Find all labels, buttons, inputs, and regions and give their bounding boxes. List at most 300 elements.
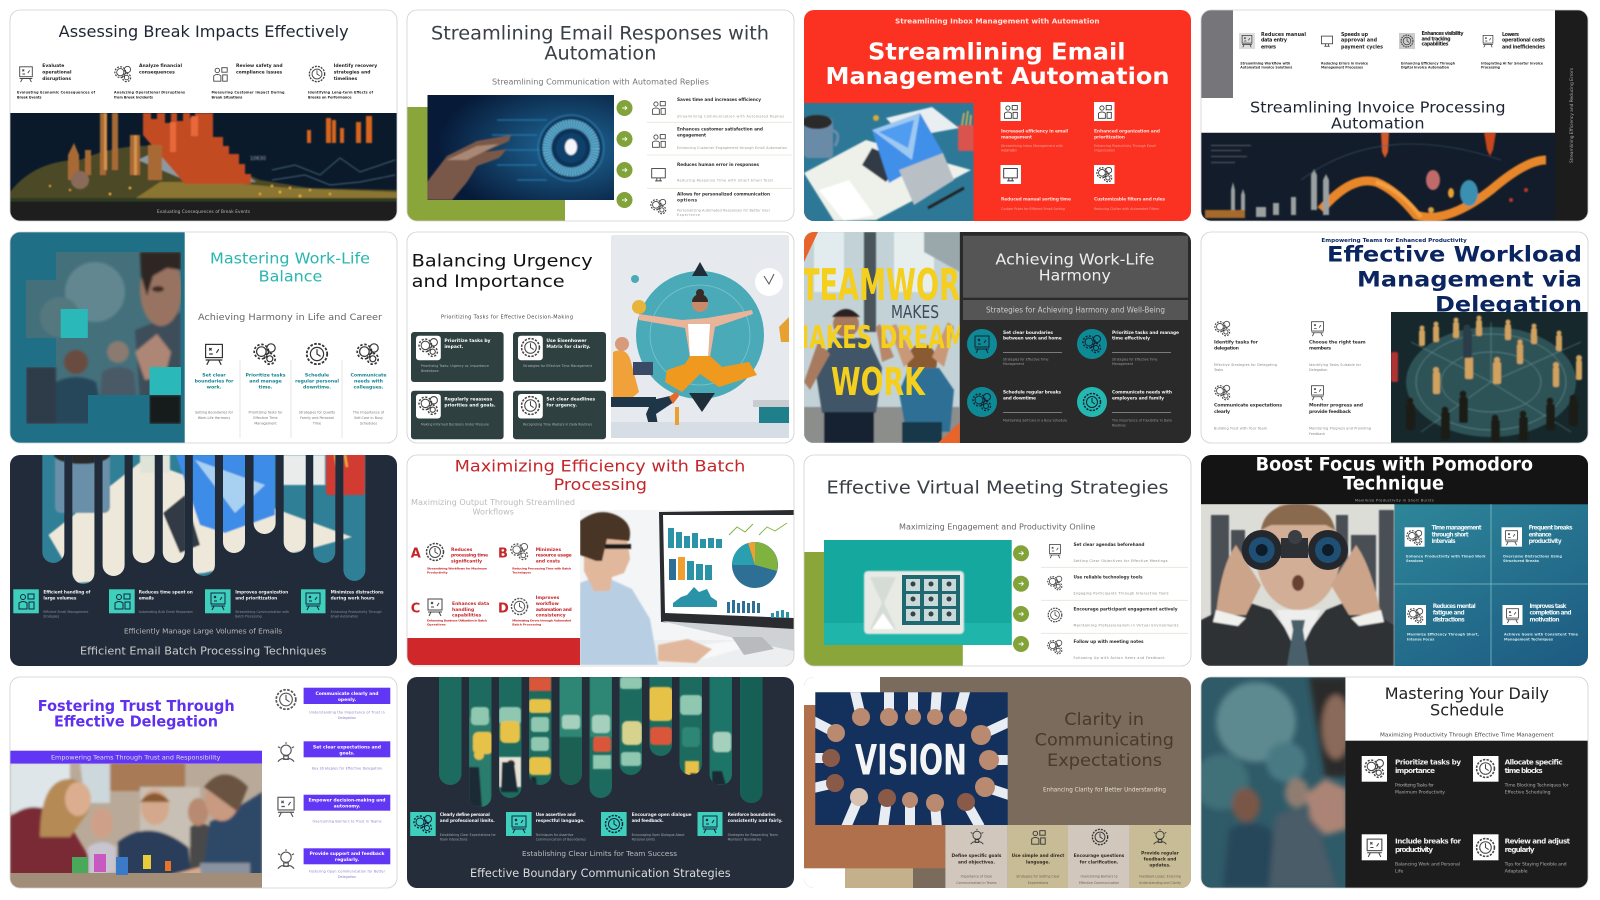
title: Streamlining Email Responses with — [431, 23, 769, 44]
title: Automation — [1331, 114, 1424, 132]
title — [1251, 101, 1504, 128]
title — [826, 39, 1170, 90]
four item row: Enhancing Productivity Through — [331, 610, 382, 614]
four strategies: Strategies for Effective Time — [1112, 357, 1157, 361]
title: and Importance — [412, 272, 565, 292]
four strategies: Communicate needs with — [1112, 389, 1172, 395]
image: team around table — [10, 764, 262, 888]
four assessment items: Break Situations — [212, 96, 242, 100]
four lettered items: workflow — [536, 601, 559, 607]
four assessment items: Identifying Long-term Effects of — [308, 90, 374, 94]
four delegation actions: Understanding the Importance of Trust in — [309, 710, 385, 714]
four item row: Reduces time spent on — [139, 589, 193, 595]
four strategies: time effectively — [1112, 336, 1150, 342]
four item row: Efficient Email Management — [43, 610, 89, 614]
benefit list: Enhancing Customer Engagement through Email Automation — [677, 146, 787, 150]
four item row: Strategies for Respecting Team — [728, 833, 778, 837]
four scheduling tips: Prioritize tasks by — [1395, 757, 1461, 766]
four scheduling tips: Allocate specific — [1505, 757, 1563, 766]
four item row: Batch Processing — [235, 615, 262, 619]
four columns: Importance of Clear — [961, 875, 993, 879]
four benefits: Achieve Goals with Consistent Time — [1504, 633, 1579, 637]
four delegation steps: Monitoring Progress and Providing — [1309, 427, 1371, 431]
four delegation steps: Effective Strategies for Delegating — [1214, 363, 1277, 367]
teal side block — [10, 232, 185, 443]
four task cards: Prioritizing Tasks: Urgency vs. Importance — [421, 364, 489, 368]
four strategies: Prioritize tasks and manage — [1112, 330, 1179, 336]
strategy list: Maintaining Professionalism in Virtual Environments — [1074, 624, 1179, 628]
title — [432, 25, 768, 60]
icon grid with four features: Organization — [1094, 149, 1115, 153]
four benefits: fatigue and — [1433, 611, 1465, 617]
four lettered items: Reducing Processing Time with Batch — [512, 566, 571, 570]
image: data city with orange ribbon — [1201, 132, 1555, 221]
strategy list: Set clear agendas beforehand — [1074, 542, 1144, 548]
image: analyst at desktop dashboard — [580, 510, 794, 665]
four benefits: Intense Focus — [1407, 637, 1434, 641]
subtitle: Streamlining Communication with Automated Replies — [492, 77, 709, 86]
four assessment items: Evaluate — [42, 63, 64, 69]
four lettered items: processing time — [451, 553, 488, 559]
four lettered items: Techniques — [512, 570, 531, 574]
four strategy columns: Prioritize tasks — [246, 372, 286, 378]
subtitle: Enhancing Clarity for Better Understanding — [1043, 787, 1166, 793]
purple subtitle band: Empowering Teams Through Trust and Responsibility — [51, 754, 221, 762]
four benefits: Structured Breaks — [1503, 559, 1539, 563]
four item row: Techniques for Assertive — [535, 833, 574, 837]
four columns: Feedback Loops: Ensuring — [1139, 875, 1181, 879]
four task cards: Making Informed Decisions Under Pressure — [421, 422, 489, 426]
benefit list: Allows for personalized communication — [677, 191, 770, 197]
four assessment items: Identify recovery — [334, 63, 377, 69]
title box: Achieving Work-Life — [995, 250, 1154, 268]
four benefits: Frequent breaks — [1529, 525, 1573, 531]
illustration: balanced person in teal circle — [611, 235, 789, 438]
footer caption bar — [10, 202, 397, 221]
benefit list: Personalizing Automated Responses for Better User — [677, 208, 771, 212]
four delegation steps: Identifying Tasks Suitable for — [1309, 363, 1362, 367]
four delegation steps: clearly — [1214, 409, 1230, 415]
four delegation steps: Identify tasks for — [1214, 339, 1259, 345]
title: Effective Workload — [1327, 243, 1582, 268]
four delegation steps: Monitor progress and — [1309, 403, 1363, 409]
title — [455, 457, 745, 494]
four task cards: Prioritize tasks by — [444, 338, 491, 344]
panel: boost focus with pomodoro — [1201, 454, 1588, 666]
green accent block — [804, 552, 963, 666]
title: Efficient Email Batch Processing Techniques — [80, 644, 327, 657]
four lettered items: Productivity — [427, 570, 448, 574]
four item row: Automating Bulk Email Responses — [139, 610, 193, 614]
four benefits: enhance — [1529, 532, 1552, 538]
subtitle: Maximizing Output Through Streamlined — [411, 498, 575, 507]
four strategy columns: colleagues. — [354, 384, 384, 390]
image: economic landscape chart — [10, 113, 397, 202]
four item row: and professional limits. — [440, 818, 495, 824]
subtitle: Prioritizing Tasks for Effective Decision-Making — [441, 315, 573, 321]
four invoice benefits: capabilities — [1422, 41, 1449, 47]
four lettered items: Reduces — [451, 547, 473, 553]
four assessment items: from Break Incidents — [114, 96, 153, 100]
four columns: Use simple and direct — [1012, 853, 1064, 859]
four item row: emails — [139, 595, 154, 601]
four benefits: Improves task — [1530, 604, 1567, 610]
four invoice benefits: Processing — [1481, 65, 1501, 69]
four item row — [410, 812, 783, 842]
four task cards: impact. — [444, 344, 464, 350]
four strategy columns: Setting Boundaries for — [195, 410, 234, 414]
image strips: speech bubbles — [407, 677, 794, 817]
four delegation actions: Empower decision-making and — [308, 798, 386, 804]
icon grid with four features: Reducing Clutter with Automated Filters — [1094, 207, 1159, 211]
four item row: during work hours — [331, 595, 375, 601]
four item row: Encourage open dialogue — [632, 812, 692, 818]
four columns: language. — [1026, 859, 1050, 865]
panel: invoice processing automation — [1201, 10, 1588, 222]
image: blurred executive pointing — [1201, 677, 1346, 888]
subtitle — [411, 498, 575, 516]
title: Mastering Work-Life — [210, 249, 370, 267]
purple subtitle band — [10, 751, 262, 764]
four invoice benefits: Reduces manual — [1261, 32, 1306, 38]
four assessment items: Review safety and — [236, 63, 283, 69]
four item row: Minimizes distractions — [331, 589, 384, 595]
panel: mastering your daily schedule — [1193, 677, 1588, 888]
title: Balance — [259, 268, 322, 286]
title box: Harmony — [1039, 267, 1111, 285]
four delegation actions: Fostering Open Communication for Better — [309, 870, 386, 874]
four columns: Communication in Teams — [956, 881, 997, 885]
strategy list: Engaging Participants Through Interactive Tools — [1074, 591, 1169, 595]
four scheduling tips — [1362, 756, 1571, 874]
four task cards: for urgency. — [546, 402, 577, 408]
four columns: Expectations — [1028, 881, 1049, 885]
eyebrow subtitle: Empowering Teams for Enhanced Productivity — [1321, 238, 1467, 244]
icon grid with four features: Custom Rules for Efficient Email Sorting — [1001, 207, 1065, 211]
four lettered items: Improves — [536, 595, 560, 601]
panel: fostering trust through delegation — [10, 677, 397, 889]
panel: mastering work-life balance — [10, 232, 397, 443]
four item row: Communication of Boundaries — [536, 838, 586, 842]
panel: streamlining email management — [802, 10, 1191, 221]
four lettered items: Batch Processing — [512, 622, 541, 626]
four item row: large volumes — [43, 595, 77, 601]
title box — [963, 236, 1188, 298]
four strategies: Management — [1003, 362, 1025, 366]
four benefits: through short — [1432, 532, 1469, 538]
four scheduling tips: Maximum Productivity — [1395, 789, 1445, 795]
four benefits: distractions — [1433, 617, 1465, 623]
four delegation steps: provide feedback — [1309, 409, 1352, 415]
four item row: Email Automation — [331, 615, 358, 619]
image: economic landscape chart: 10630 — [250, 156, 266, 162]
four scheduling tips: Adaptable — [1505, 868, 1528, 874]
title: Streamlining Invoice Processing — [1250, 98, 1506, 116]
four item row: Use assertive and — [536, 812, 576, 818]
four lettered items: capabilities — [452, 613, 482, 619]
four invoice benefits: approval and — [1341, 38, 1378, 44]
title: Balancing Urgency — [412, 252, 593, 272]
four item row: Improves organization — [235, 589, 288, 595]
four columns: feedback and — [1144, 856, 1176, 862]
four invoice benefits: and inefficiencies — [1502, 44, 1545, 50]
four delegation actions: autonomy. — [334, 804, 361, 810]
four strategy columns: Schedule — [305, 372, 329, 378]
four assessment items: timelines — [334, 76, 357, 82]
four lettered items: resource usage — [536, 553, 572, 559]
icon grid with four features: Enhanced organization and — [1094, 128, 1160, 134]
green accent block — [407, 107, 565, 221]
four benefits: productivity — [1529, 539, 1562, 545]
icon grid with four features: Streamlining Inbox Management with — [1001, 144, 1063, 148]
subtitle: Efficiently Manage Large Volumes of Emails — [124, 626, 282, 635]
four lettered items: B — [498, 546, 508, 561]
panel: assessing break impacts — [10, 10, 397, 221]
benefit list: engagement — [677, 133, 706, 139]
title: Fostering Trust Through — [38, 697, 235, 715]
icon grid with four features: Enhancing Productivity Through Email — [1094, 144, 1156, 148]
title: Management Automation — [826, 64, 1170, 90]
four scheduling tips: Balancing Work and Personal — [1395, 861, 1460, 867]
four scheduling tips: Review and adjust — [1505, 836, 1571, 845]
four item row: Reinforce boundaries — [728, 812, 776, 818]
four delegation actions: Delegation — [338, 716, 356, 720]
four assessment items: strategies and — [334, 70, 371, 76]
four item row: Streamlining Communication with — [235, 610, 289, 614]
four benefits: Enhance Productivity with Timed Work — [1406, 554, 1486, 558]
benefit list — [647, 97, 792, 217]
four columns — [945, 825, 1191, 888]
four lettered items: C — [411, 601, 420, 616]
four item row: Establishing Clear Expectations for — [440, 833, 497, 837]
red accent bar — [407, 638, 580, 665]
four columns: Understanding and Clarity — [1139, 881, 1181, 885]
four lettered items: and costs — [536, 559, 560, 565]
four invoice benefits: Automated Invoice Solutions — [1240, 65, 1292, 69]
four benefits: Time management — [1432, 525, 1482, 531]
four strategy columns: time. — [259, 384, 273, 390]
four lettered items: Enhances data — [452, 601, 489, 607]
four delegation steps: Choose the right team — [1309, 339, 1366, 345]
four task cards: Use Eisenhower — [546, 338, 587, 344]
four strategies: Set clear boundaries — [1003, 330, 1053, 336]
four scheduling tips: Tips for Staying Flexible and — [1504, 861, 1567, 867]
four assessment items: Measuring Customer Impact During — [212, 90, 285, 94]
four invoice benefits: payment cycles — [1341, 44, 1383, 50]
four assessment items: compliance issues — [236, 70, 282, 76]
four task cards: Regularly reassess — [444, 396, 493, 402]
title: Effective Delegation — [54, 712, 218, 730]
four columns: for clarification. — [1080, 859, 1119, 865]
title: Management via — [1357, 268, 1582, 293]
four assessment items: Evaluating Economic Consequences of — [17, 90, 96, 94]
panel: balancing urgency and importance — [407, 232, 794, 443]
four strategies: Strategies for Effective Time — [1003, 357, 1048, 361]
grey accent block — [1201, 10, 1233, 98]
panel: maximizing efficiency with batch processing — [407, 455, 794, 666]
four columns: updates. — [1149, 862, 1171, 868]
white title panel: Mastering Your Daily — [1385, 684, 1549, 703]
benefit list: Enhances customer satisfaction and — [677, 126, 763, 132]
four delegation actions — [276, 688, 390, 879]
four task cards: Matrix for clarity. — [546, 344, 591, 350]
four lettered items: automation and — [536, 607, 572, 613]
four strategies: Schedule regular breaks — [1003, 389, 1061, 395]
four strategies: Routines — [1112, 424, 1126, 428]
image: man with binoculars — [1201, 504, 1394, 666]
title: Automation — [544, 43, 656, 64]
four item row: and feedback. — [632, 818, 664, 824]
four delegation steps: delegation — [1214, 345, 1239, 351]
four assessment items: Analyze financial — [139, 63, 182, 69]
four delegation actions: Communicate clearly and — [316, 691, 378, 697]
four strategy columns — [195, 344, 387, 438]
title — [412, 252, 593, 292]
strategy list — [1041, 542, 1188, 660]
four delegation actions: Delegation — [338, 875, 356, 879]
image: network of standing figures — [1391, 312, 1588, 443]
four item row: Personal Limits — [632, 838, 655, 842]
header band with title: Technique — [1343, 472, 1444, 494]
image: robotic hand and circular interface — [428, 95, 614, 200]
icon grid with four features — [1000, 102, 1165, 211]
image: email on desk — [804, 103, 974, 221]
four benefits: intervals — [1432, 539, 1456, 545]
panel: clarity in communicating expectations — [804, 677, 1191, 888]
strategy list: Setting Clear Objectives for Effective Meetings — [1074, 559, 1168, 563]
four item row: Team Interactions — [439, 838, 468, 842]
four task cards: Strategies for Effective Time Management — [523, 364, 593, 368]
subtitle: Maximizing Engagement and Productivity Online — [899, 522, 1096, 531]
four invoice benefits: Lowers — [1502, 32, 1519, 38]
footer caption bar: Evaluating Consequences of Break Events — [157, 209, 250, 214]
strategy list: Following Up with Action Items and Feedback — [1074, 656, 1165, 660]
strategy list: Use reliable technology tools — [1074, 574, 1143, 580]
four columns: Strategies for Setting Clear — [1016, 875, 1060, 879]
four strategy columns: Schedules — [360, 422, 377, 426]
four lettered items: Streamlining Workflows for Maximum — [427, 566, 487, 570]
four strategy columns: regular personal — [295, 378, 339, 384]
header band with title: Boost Focus with Pomodoro — [1256, 454, 1533, 476]
four strategy columns: Self-Care in Busy — [354, 416, 383, 420]
four invoice benefits: Enhances visibility — [1422, 31, 1464, 37]
dark side strip with vertical caption — [1555, 10, 1588, 221]
four delegation actions: goals. — [339, 750, 355, 756]
subtitle: Achieving Harmony in Life and Career — [198, 312, 382, 323]
four strategy columns: The Importance of — [352, 410, 385, 414]
panel: effective workload management — [1201, 232, 1588, 443]
four item row: Members' Boundaries — [728, 838, 762, 842]
image: blurred executive pointing — [26, 252, 182, 424]
title: Maximizing Efficiency with Batch — [455, 457, 745, 476]
four benefits: Management Techniques — [1504, 637, 1553, 641]
four item row: and prioritization — [235, 595, 277, 601]
subtitle: Workflows — [472, 507, 514, 516]
benefit list: Reduces human error in responses — [677, 162, 759, 168]
four lettered items: significantly — [451, 559, 482, 565]
panel: effective virtual meeting strategies — [804, 455, 1191, 666]
benefit list: Streamlining Communication with Automated Replies — [677, 114, 784, 118]
title — [1035, 710, 1174, 770]
benefit list: Reducing Response Time with Smart Email Tools — [677, 179, 773, 183]
four delegation steps: Feedback — [1309, 432, 1325, 436]
dark side strip with vertical caption: Streamlining Efficiency and Reducing Errors — [1569, 67, 1575, 163]
four strategy columns: Communicate — [350, 372, 387, 378]
four benefits: Reduces mental — [1433, 604, 1476, 610]
colour blocks — [804, 677, 945, 888]
icon grid with four features: management — [1001, 134, 1033, 140]
four strategy columns: Strategies for Quality — [299, 410, 335, 414]
white title panel: Maximizing Productivity Through Effective Time Management — [1380, 732, 1554, 738]
title: Assessing Break Impacts Effectively — [59, 22, 349, 41]
image: fists around VISION: VISION — [855, 735, 967, 784]
four scheduling tips: productivity — [1395, 845, 1433, 854]
title — [38, 697, 235, 730]
four delegation actions: Provide support and feedback — [310, 851, 386, 857]
four strategy columns: downtime. — [303, 384, 331, 390]
title: Expectations — [1047, 751, 1162, 770]
title: Processing — [554, 475, 647, 494]
four strategies: employers and family — [1112, 395, 1164, 401]
icon grid with four features: Customizable filters and rules — [1094, 197, 1165, 203]
four invoice benefits: Enhancing Efficiency Through — [1401, 61, 1456, 65]
four invoice benefits: Management Processes — [1321, 65, 1363, 69]
title: Communicating — [1035, 731, 1174, 750]
four strategy columns: Effective Time — [253, 416, 278, 420]
image: teamwork celebration with wall lettering: MAKES — [891, 302, 939, 323]
four columns: Overcoming Barriers to — [1080, 875, 1118, 879]
four item row — [13, 589, 384, 619]
four assessment items: consequences — [139, 70, 175, 76]
four scheduling tips: Prioritizing Tasks for — [1395, 782, 1434, 788]
four strategies: Maintaining Self-Care in a Busy Schedule — [1003, 419, 1067, 423]
four scheduling tips: time blocks — [1505, 766, 1543, 775]
four scheduling tips: Life — [1395, 868, 1403, 874]
icon grid with four features: Reduced manual sorting time — [1001, 197, 1071, 203]
four item row: Strategies — [43, 615, 60, 619]
four invoice benefits: Speeds up — [1341, 32, 1369, 38]
four scheduling tips: Time Blocking Techniques for — [1504, 782, 1569, 788]
subtitle band — [963, 300, 1188, 320]
four lettered items — [411, 543, 572, 626]
four strategy columns: Set clear — [202, 372, 226, 378]
image: teamwork celebration with wall lettering: WORK — [831, 360, 926, 404]
subtitle band: Strategies for Achieving Harmony and Well-Being — [986, 305, 1165, 314]
four assessment items: Break Events — [17, 96, 42, 100]
four assessment items: disruptions — [42, 76, 71, 82]
four delegation steps: members — [1309, 345, 1331, 351]
four invoice benefits: errors — [1261, 44, 1276, 50]
four delegation actions: Set clear expectations and — [313, 744, 381, 750]
title — [212, 252, 370, 282]
four strategy columns: Family and Personal — [300, 416, 334, 420]
four delegation steps: Communicate expectations — [1214, 403, 1282, 409]
eyebrow subtitle: Streamlining Inbox Management with Automation — [895, 17, 1100, 25]
four invoice benefits: Streamlining Workflow with — [1240, 61, 1291, 65]
four lettered items: D — [498, 601, 509, 616]
four strategy columns: needs with — [354, 378, 383, 384]
benefit list: options — [677, 198, 697, 204]
four lettered items: Minimizing Errors through Automated — [512, 619, 571, 623]
four item row: consistently and fairly. — [728, 818, 783, 824]
four strategies: Management — [1112, 362, 1134, 366]
white title panel — [1345, 677, 1588, 741]
title: Clarity in — [1064, 710, 1144, 729]
four lettered items: consistency — [536, 613, 566, 619]
four task cards: Set clear deadlines — [546, 396, 595, 402]
four columns: Encourage questions — [1074, 853, 1125, 859]
four strategy columns: and manage — [249, 378, 282, 384]
